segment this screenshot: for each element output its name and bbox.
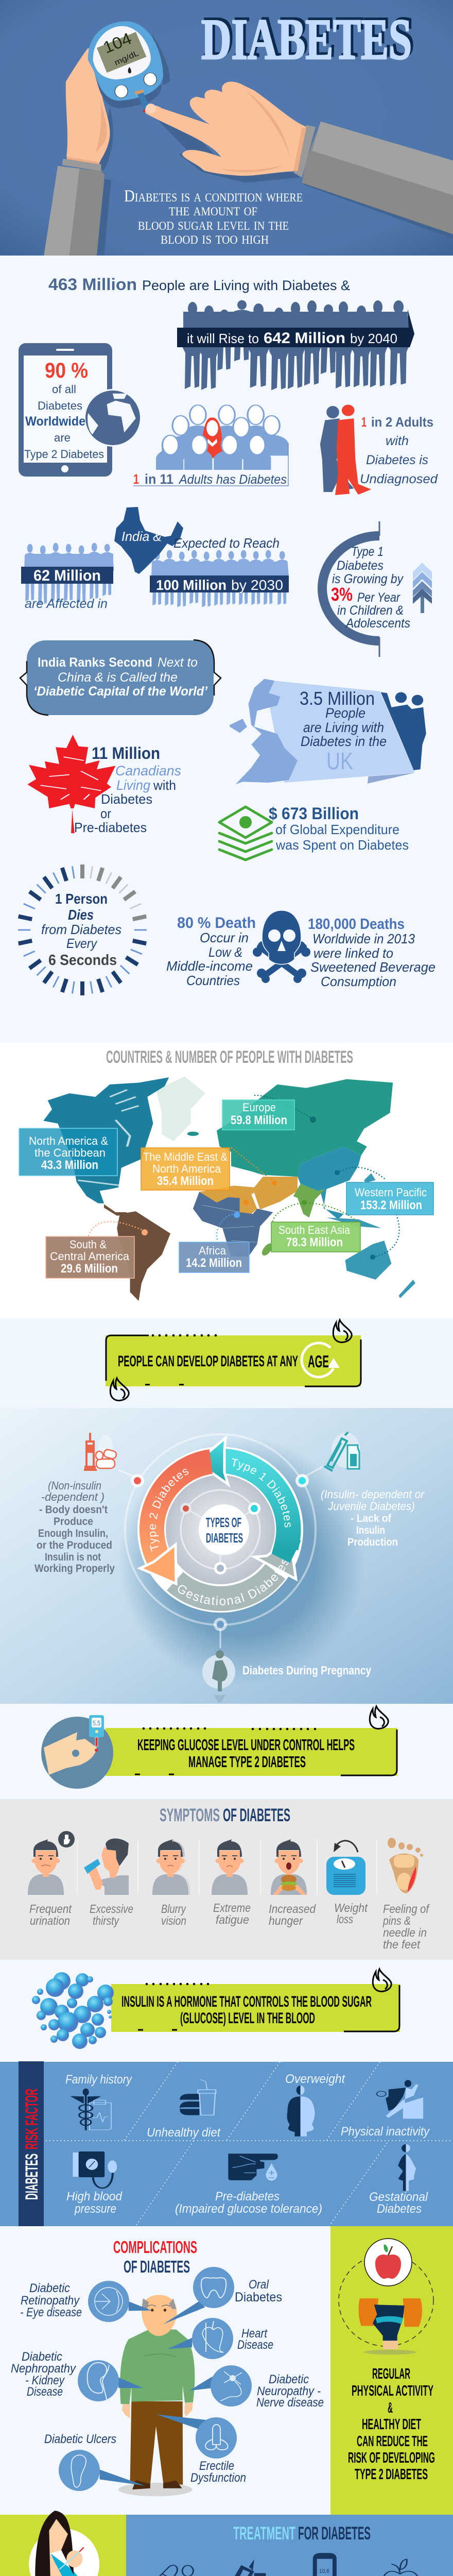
skull and death statistics: Countries bbox=[186, 973, 240, 988]
meter display: 104 bbox=[100, 29, 134, 57]
text: regular activity: REGULAR bbox=[372, 2366, 410, 2382]
panel: risk factors bbox=[0, 2061, 453, 2226]
risk: high blood pressure: High blood bbox=[66, 2190, 123, 2204]
type 1 growth callout: Adolescents bbox=[345, 616, 410, 631]
heading: FOR DIABETES bbox=[298, 2523, 371, 2544]
risk: high blood pressure: pressure bbox=[74, 2202, 116, 2216]
canada statistic: 11 Million bbox=[92, 744, 160, 762]
canada statistic: or bbox=[100, 806, 111, 821]
region label: middle east: The Middle East & bbox=[143, 1150, 228, 1163]
complication: eye: - Eye disease bbox=[20, 2306, 82, 2319]
uk map bbox=[230, 679, 298, 785]
icon: insulin molecule bbox=[32, 1972, 114, 2049]
india statistic: India & bbox=[121, 529, 162, 544]
symptom: blurry vision: vision bbox=[161, 1914, 186, 1927]
symptom: frequent urination: urination bbox=[30, 1914, 70, 1927]
canada statistic: Diabetes bbox=[101, 791, 152, 807]
panel: treatment: 10,6 bbox=[319, 2568, 329, 2574]
clock: 1 person dies every 6 seconds: Dies bbox=[68, 907, 94, 923]
UK statistic: Diabetes in the bbox=[301, 734, 387, 749]
region label: africa: Africa bbox=[199, 1244, 226, 1257]
connector dots bbox=[89, 1095, 399, 1257]
region label: western pacific: 153.2 Million bbox=[360, 1198, 422, 1212]
symptom: extreme fatigue: Extreme bbox=[213, 1901, 251, 1914]
tablet: 90 percent type 2 bbox=[19, 343, 142, 477]
text: regular activity: & bbox=[388, 2400, 393, 2416]
type 1 growth callout: Diabetes bbox=[337, 558, 384, 573]
region label: north america: 43.3 Million bbox=[41, 1158, 98, 1172]
canada statistic bbox=[27, 735, 181, 835]
treatment icons bbox=[155, 2553, 419, 2576]
icon: growth arrow bbox=[413, 563, 432, 613]
symptom: excessive thirst: Excessive bbox=[90, 1902, 133, 1916]
crowd right bbox=[151, 550, 289, 607]
complication: nerve: Diabetic bbox=[269, 2372, 309, 2386]
canada statistic: Living bbox=[116, 777, 150, 793]
panel: type 1 cannot be prevented bbox=[0, 2511, 126, 2576]
heading bbox=[113, 2238, 197, 2276]
clock: 1 person dies every 6 seconds: from Diabetes bbox=[41, 922, 121, 937]
icon: syringe and pills bbox=[84, 1433, 117, 1470]
tablet text: are bbox=[54, 431, 71, 444]
risk: gestational diabetes: Diabetes bbox=[377, 2202, 422, 2216]
risk: family history bbox=[65, 2073, 133, 2130]
icon: syringe and bottle bbox=[225, 2559, 268, 2576]
icon: pregnancy bbox=[202, 1650, 235, 1702]
region label: western pacific: Western Pacific bbox=[355, 1186, 427, 1199]
center label: TYPES OF bbox=[206, 1515, 241, 1530]
risk: overweight: Overweight bbox=[285, 2072, 345, 2086]
banner: any age bbox=[106, 1320, 361, 1400]
complication: oral bbox=[193, 2267, 282, 2308]
region label: europe: 59.8 Million bbox=[231, 1113, 287, 1127]
crowd left bbox=[24, 543, 114, 605]
segment: type 2 bbox=[137, 1449, 213, 1586]
region label: middle east: 35.4 Million bbox=[157, 1174, 214, 1188]
text: type 2 description bbox=[34, 1479, 115, 1574]
risk: unhealthy diet bbox=[147, 2080, 221, 2140]
icon: globe bbox=[84, 389, 142, 447]
couple icon: 1 in 2 adults undiagnosed: in 2 Adults bbox=[371, 414, 433, 430]
global expenditure statistic: $ 673 Billion bbox=[269, 804, 359, 823]
skull and death statistics: 180,000 Deaths bbox=[308, 916, 405, 933]
symptom: excessive thirst bbox=[84, 1838, 133, 1927]
region label: europe bbox=[222, 1100, 294, 1130]
region label: south america: Central America bbox=[50, 1250, 130, 1263]
skull and death statistics: Middle-income bbox=[166, 958, 253, 974]
risk: high blood pressure bbox=[66, 2151, 123, 2216]
crowd with banner: 642 million: by 2040 bbox=[350, 331, 397, 346]
callout: india ranks second bbox=[20, 640, 221, 715]
panel: types of diabetes: Diabetes During Pregnancy bbox=[242, 1664, 371, 1677]
region label: south east asia bbox=[271, 1222, 360, 1252]
risk: pre-diabetes: Pre-diabetes bbox=[215, 2190, 280, 2204]
region label: europe: Europe bbox=[242, 1101, 276, 1114]
complication: eye: Retinopathy bbox=[21, 2294, 80, 2308]
canada statistic: Pre-diabetes bbox=[74, 820, 147, 835]
panel: activity and diet bbox=[330, 2226, 453, 2515]
complication: oral: Diabetes bbox=[235, 2290, 282, 2304]
intro text: blood is too high bbox=[161, 229, 269, 248]
text: type 1 description: Juvenile Diabetes) bbox=[327, 1500, 415, 1513]
complication: heart bbox=[192, 2318, 273, 2359]
symptom: weight loss: Weight bbox=[334, 1901, 368, 1914]
complication: heart: Heart bbox=[241, 2327, 268, 2341]
heading: OF DIABETES bbox=[124, 2257, 190, 2276]
global expenditure statistic: was Spent on Diabetes bbox=[275, 837, 409, 853]
couple icon: 1 in 2 adults undiagnosed: 1 bbox=[361, 414, 367, 430]
symptom: pins and needles: the feet bbox=[383, 1938, 421, 1951]
complication: erectile dysfunction bbox=[190, 2417, 246, 2485]
text: type 2 description: Enough Insulin, bbox=[38, 1528, 108, 1539]
icon: apple outline bbox=[383, 2559, 419, 2576]
cycle diagram bbox=[118, 1433, 322, 1648]
icon: gloved hand and dumbbell bbox=[358, 2298, 422, 2354]
tablet text: Worldwide bbox=[25, 414, 85, 429]
region label: north america bbox=[19, 1128, 117, 1176]
complication: nerve: Nerve disease bbox=[256, 2396, 324, 2410]
heading: COMPLICATIONS bbox=[113, 2238, 197, 2257]
meter display: mg/dL bbox=[113, 49, 140, 67]
complication: erectile dysfunction: Dysfunction bbox=[190, 2471, 246, 2485]
tablet text: 90 % bbox=[45, 358, 88, 382]
symptom: increased hunger: hunger bbox=[269, 1914, 303, 1927]
type 1 growth callout: in Children & bbox=[337, 603, 404, 618]
region label: south east asia: South East Asia bbox=[278, 1224, 351, 1236]
couple icon: 1 in 2 adults undiagnosed: Undiagnosed bbox=[360, 472, 438, 486]
banner: any age: PEOPLE CAN DEVELOP DIABETES AT ANY bbox=[118, 1353, 298, 1370]
UK statistic: are Living with bbox=[303, 720, 384, 735]
symptom: pins and needles: needle in bbox=[383, 1926, 427, 1939]
india statistic bbox=[21, 507, 289, 611]
icon: age cycle: AGE bbox=[308, 1352, 329, 1371]
text: type 1 description: Insulin bbox=[356, 1524, 385, 1536]
global expenditure statistic: of Global Expenditure bbox=[275, 822, 399, 837]
icon: syringe and vial bbox=[324, 1432, 360, 1471]
group icon: 1 in 11 adults bbox=[133, 405, 288, 487]
text: type 1 description: Production bbox=[347, 1536, 398, 1548]
text: type 1 description: (Insulin- dependent or bbox=[321, 1488, 425, 1501]
group icon: 1 in 11 adults: Adults has Diabetes bbox=[178, 472, 287, 487]
tablet text: of all bbox=[52, 383, 76, 396]
complication: kidney: Nephropathy bbox=[11, 2362, 77, 2376]
hero panel bbox=[0, 0, 453, 256]
symptom: frequent urination bbox=[28, 1831, 75, 1927]
icon: meter bbox=[313, 2553, 337, 2576]
symptom: blurry vision: Blurry bbox=[161, 1902, 186, 1916]
callout: india ranks second: India Ranks Second bbox=[38, 655, 152, 670]
icon: pills bbox=[155, 2565, 195, 2576]
heading: OF DIABETES bbox=[223, 1805, 290, 1825]
complication: heart: Disease bbox=[237, 2338, 273, 2352]
complication: ulcers bbox=[44, 2432, 116, 2491]
intro text: blood sugar level in the bbox=[138, 215, 289, 234]
region label: south america bbox=[46, 1236, 134, 1278]
text: type 2 description: or the Produced bbox=[37, 1539, 112, 1551]
canada statistic: Canadians bbox=[115, 763, 181, 778]
skull and death statistics: Worldwide in 2013 bbox=[312, 931, 415, 946]
tablet text: Type 2 Diabetes bbox=[24, 448, 104, 461]
icon: finger prick and meter bbox=[41, 1715, 113, 1789]
risk: unhealthy diet: Unhealthy diet bbox=[147, 2126, 221, 2140]
text: type 1 description: - Lack of bbox=[351, 1513, 392, 1524]
icon: maple leaf bbox=[27, 735, 115, 833]
complication: nerve: Neuropathy - bbox=[257, 2384, 321, 2398]
symptom: blurry vision bbox=[152, 1839, 190, 1927]
center label bbox=[199, 1504, 249, 1555]
symptom: extreme fatigue: fatigue bbox=[216, 1913, 249, 1926]
crowd with banner: 642 million bbox=[177, 300, 414, 391]
type 1 growth callout: Per Year bbox=[357, 590, 400, 605]
icon: apple bbox=[364, 2239, 412, 2286]
india statistic: by 2030 bbox=[231, 577, 283, 593]
complication: erectile dysfunction: Erectile bbox=[199, 2459, 234, 2473]
region label: middle east: North America bbox=[152, 1162, 221, 1175]
india statistic: 100 Million bbox=[156, 577, 226, 593]
text: type 2 description: - Body doesn't bbox=[39, 1504, 108, 1516]
skull and death statistics: 80 % Death bbox=[177, 914, 256, 931]
canada statistic: with bbox=[153, 777, 176, 793]
world map bbox=[19, 1076, 433, 1301]
intro text: Diabetes is a condition where bbox=[124, 187, 303, 206]
clock: 1 person dies every 6 seconds: Every bbox=[66, 936, 98, 951]
side title: DIABETES bbox=[22, 2154, 42, 2200]
symptom: frequent urination: Frequent bbox=[29, 1902, 72, 1916]
region label: north america: North America & bbox=[29, 1134, 108, 1147]
complication: kidney: - Kidney bbox=[25, 2374, 65, 2387]
crowd with banner: 642 million: it will Rise to bbox=[187, 331, 259, 346]
icon: finger prick and meter: 5.5 bbox=[93, 1719, 100, 1727]
text: type 2 description: Insulin is not bbox=[45, 1551, 101, 1563]
side title: RISK FACTOR bbox=[22, 2089, 42, 2149]
text: type 2 description: (Non-insulin bbox=[48, 1479, 101, 1492]
segment: gestational: Gestational Diabetes bbox=[178, 1559, 289, 1605]
icon: age cycle bbox=[299, 1340, 340, 1380]
complication: eye bbox=[20, 2281, 129, 2322]
region label: western pacific bbox=[346, 1182, 433, 1215]
region label: north america: the Caribbean bbox=[34, 1146, 106, 1159]
silhouettes bbox=[381, 692, 426, 770]
symptom: pins and needles: pins & bbox=[382, 1914, 411, 1927]
panel: treatment bbox=[126, 2515, 453, 2576]
region label: middle east bbox=[141, 1148, 230, 1190]
global expenditure statistic bbox=[219, 804, 409, 860]
illustration: hands with glucose meter bbox=[44, 21, 453, 256]
intro text bbox=[124, 187, 303, 248]
text: type 1 description bbox=[321, 1488, 425, 1548]
india statistic: 62 Million bbox=[33, 567, 101, 584]
callout: india ranks second: Next to bbox=[158, 655, 198, 670]
intro text: the amount of bbox=[169, 201, 257, 219]
type 1 growth callout: is Growing by bbox=[332, 572, 404, 586]
couple icon: 1 in 2 adults undiagnosed bbox=[320, 405, 438, 495]
text: regular activity bbox=[348, 2366, 435, 2483]
complication: ulcers: Diabetic Ulcers bbox=[44, 2432, 116, 2446]
headline: 463 million: People are Living with Diabetes & bbox=[142, 278, 350, 293]
skull and death statistics: Consumption bbox=[321, 974, 396, 989]
figure: older man bbox=[118, 2295, 195, 2496]
text: type 2 description: -dependent ) bbox=[41, 1490, 104, 1503]
tablet text: Diabetes bbox=[38, 399, 82, 412]
type 1 growth callout: Type 1 bbox=[351, 545, 384, 559]
crowd with banner: 642 million: 642 Million bbox=[264, 330, 345, 347]
india map bbox=[114, 507, 183, 574]
banner: glucose control bbox=[41, 1706, 397, 1789]
type 1 growth callout: 3% bbox=[331, 584, 353, 605]
UK statistic: People bbox=[325, 705, 365, 721]
symptom: excessive thirst: thirsty bbox=[93, 1914, 119, 1927]
symptom: extreme fatigue bbox=[212, 1839, 251, 1926]
symptom: pins and needles bbox=[382, 1838, 430, 1951]
symptom: weight loss: loss bbox=[337, 1912, 353, 1926]
meter display bbox=[100, 29, 140, 67]
symptom: increased hunger: Increased bbox=[269, 1902, 316, 1916]
risk: pre-diabetes bbox=[175, 2154, 322, 2216]
clock: 1 person dies every 6 seconds bbox=[18, 865, 147, 995]
skull and death statistics bbox=[166, 910, 435, 989]
complication: oral: Oral bbox=[249, 2278, 269, 2292]
skull and death statistics: Low & bbox=[208, 944, 242, 960]
icon: skull bbox=[253, 910, 310, 983]
region label: africa bbox=[179, 1242, 249, 1273]
figure: woman injecting bbox=[29, 2511, 99, 2576]
nodes bbox=[131, 1474, 309, 1631]
type 1 growth callout bbox=[322, 521, 432, 657]
segment: type 1 bbox=[210, 1435, 301, 1563]
side title bbox=[19, 2061, 44, 2226]
skull and death statistics: Sweetened Beverage bbox=[310, 959, 435, 975]
risk: pre-diabetes: (Impaired glucose tolerance) bbox=[175, 2202, 322, 2216]
panel: symptoms bbox=[28, 1805, 430, 1951]
india statistic: are Affected in bbox=[25, 597, 108, 611]
callouts bbox=[100, 2301, 212, 2486]
risk: gestational diabetes: Gestational bbox=[369, 2190, 428, 2204]
symptom: pins and needles: Feeling of bbox=[383, 1902, 430, 1916]
icon: money bbox=[219, 807, 272, 860]
callout: india ranks second: China & is Called the bbox=[58, 670, 178, 685]
region label: africa: 14.2 Million bbox=[186, 1256, 242, 1270]
region label: south america: 29.6 Million bbox=[61, 1262, 118, 1276]
UK statistic bbox=[230, 679, 426, 785]
clock: 1 person dies every 6 seconds: 1 Person bbox=[55, 891, 108, 907]
clock: 1 person dies every 6 seconds: 6 Seconds bbox=[48, 952, 117, 969]
region label: south america: South & bbox=[69, 1238, 107, 1251]
panel: types of diabetes bbox=[0, 1408, 453, 1704]
complication: kidney: Disease bbox=[27, 2385, 63, 2399]
symptom: increased hunger bbox=[269, 1839, 316, 1927]
skull and death statistics: Occur in bbox=[200, 930, 249, 945]
complication: kidney: Diabetic bbox=[22, 2350, 62, 2364]
complication: kidney bbox=[11, 2350, 119, 2401]
headline: 463 million bbox=[48, 275, 350, 294]
text: type 2 description: Working Properly bbox=[34, 1563, 115, 1574]
risk: physical inactivity: Physical inactivity bbox=[341, 2125, 430, 2139]
radial ticks bbox=[19, 865, 146, 995]
UK statistic: 3.5 Million bbox=[300, 688, 375, 709]
couple icon: 1 in 2 adults undiagnosed: Diabetes is bbox=[366, 453, 428, 467]
couple icon: 1 in 2 adults undiagnosed: with bbox=[386, 434, 409, 448]
group icon: 1 in 11 adults: in 11 bbox=[145, 471, 173, 487]
region label: south east asia: 78.3 Million bbox=[286, 1235, 343, 1249]
UK statistic: UK bbox=[326, 748, 353, 774]
segment: type 2: Type 2 Diabetes bbox=[149, 1469, 188, 1552]
headline: 463 million: 463 Million bbox=[48, 275, 137, 294]
center label: DIABETES bbox=[206, 1530, 243, 1546]
callout: india ranks second: ‘Diabetic Capital of the World’ bbox=[33, 684, 208, 699]
segment: type 1: Type 1 Diabetes bbox=[232, 1458, 290, 1528]
risk: physical inactivity bbox=[341, 2080, 430, 2139]
symptom: weight loss bbox=[326, 1841, 368, 1926]
risk: gestational diabetes bbox=[369, 2144, 428, 2216]
panel: complications bbox=[11, 2238, 324, 2496]
heading: SYMPTOMS bbox=[160, 1805, 220, 1825]
text: type 2 description: Produce bbox=[54, 1516, 93, 1528]
complication: nerve bbox=[211, 2365, 324, 2410]
banner: insulin bbox=[32, 1969, 400, 2049]
india statistic: Expected to Reach bbox=[173, 535, 280, 551]
banner: glucose control: MANAGE TYPE 2 DIABETES bbox=[188, 1753, 306, 1771]
heading: TREATMENT bbox=[233, 2523, 295, 2544]
skull and death statistics: were linked to bbox=[313, 945, 393, 961]
tablet text bbox=[24, 358, 104, 461]
risk: family history: Family history bbox=[65, 2073, 133, 2087]
group icon: 1 in 11 adults: 1 bbox=[133, 471, 139, 487]
banner: insulin: (GLUCOSE) LEVEL IN THE BLOOD bbox=[180, 2010, 315, 2027]
risk: overweight bbox=[285, 2072, 345, 2137]
complication: eye: Diabetic bbox=[29, 2281, 70, 2295]
